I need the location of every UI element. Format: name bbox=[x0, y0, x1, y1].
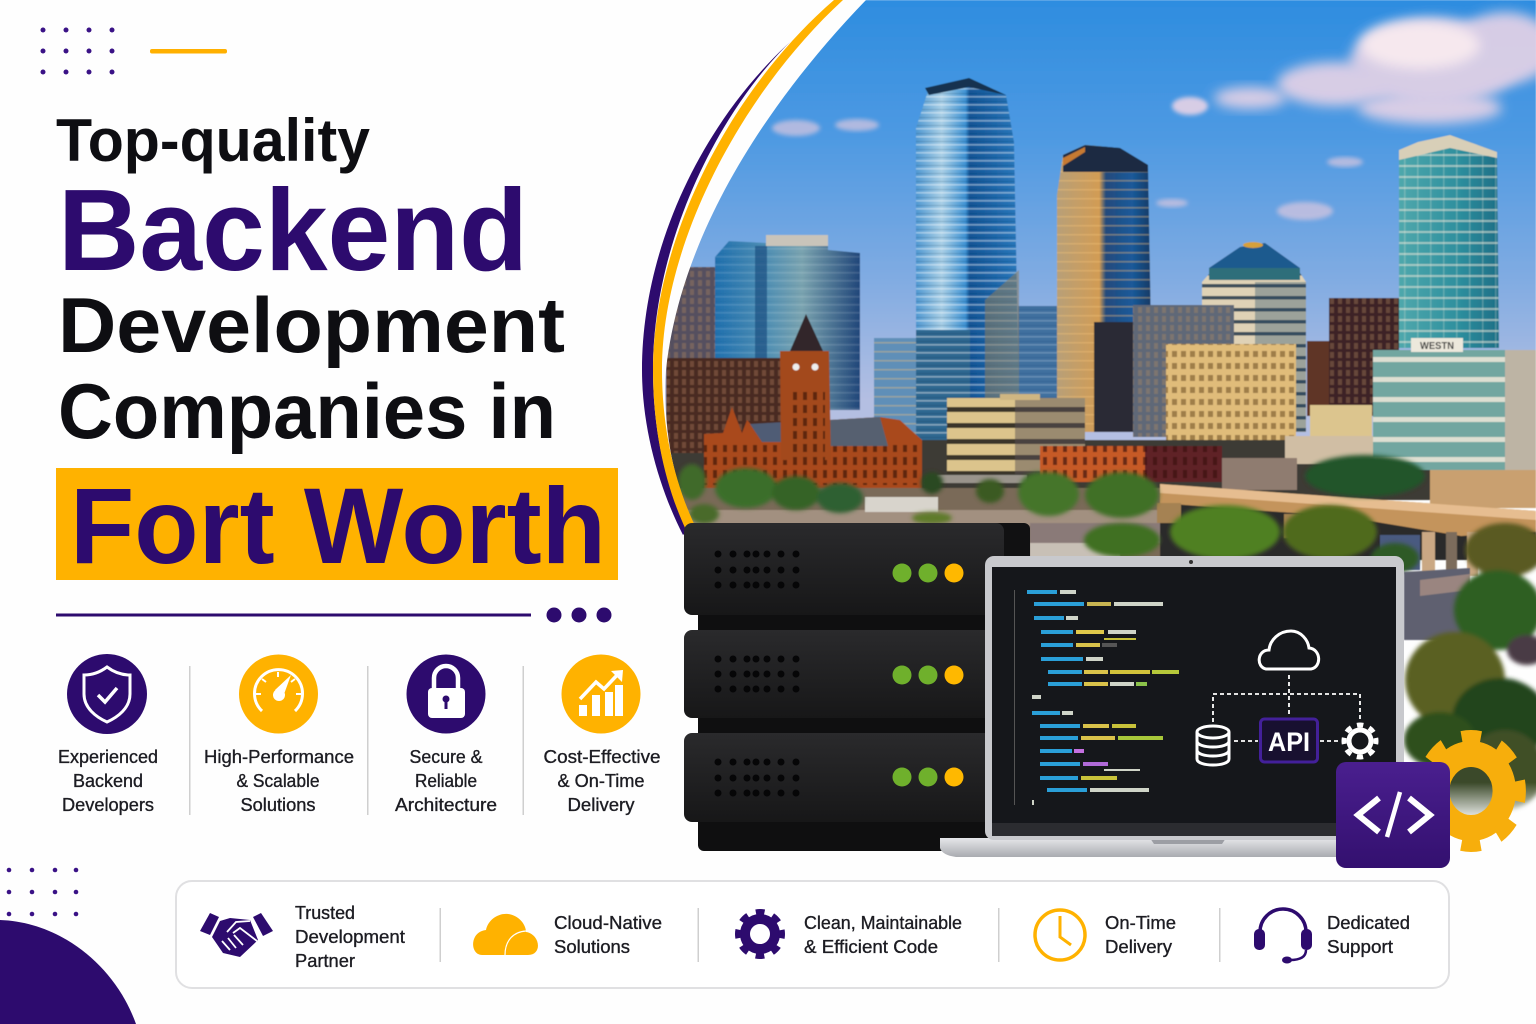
bottom-left dots bbox=[7, 868, 78, 916]
code tile bbox=[1336, 762, 1450, 868]
feature: experienced backend developers: Backend bbox=[73, 770, 143, 791]
small blue towers bbox=[874, 338, 918, 440]
feature: secure and reliable: Architecture bbox=[395, 794, 497, 815]
icon: growth chart bbox=[562, 654, 640, 734]
icon: purple gear bbox=[738, 912, 782, 956]
purple corner shape bbox=[0, 920, 136, 1024]
feature: high-performance: Solutions bbox=[240, 794, 316, 815]
westin building: WESTN bbox=[1420, 341, 1454, 352]
gold accent bar bbox=[150, 49, 227, 54]
feature: secure and reliable: Reliable bbox=[415, 770, 477, 791]
benefit: on-time delivery: On-Time bbox=[1105, 912, 1176, 933]
server unit 3 bbox=[684, 733, 1004, 822]
feature: experienced backend developers: Developers bbox=[62, 794, 154, 815]
server unit 1 bbox=[684, 523, 1030, 615]
feature: high-performance bbox=[204, 654, 354, 815]
server stack bbox=[684, 523, 1030, 851]
main glass tower bbox=[916, 78, 1019, 445]
benefit: cloud-native: Cloud-Native bbox=[554, 912, 662, 933]
benefit: trusted partner bbox=[200, 902, 405, 971]
benefit: on-time delivery bbox=[1035, 910, 1176, 960]
sky bbox=[640, 0, 1536, 470]
far left tower bbox=[666, 267, 716, 367]
dark filler behind low buildings bbox=[666, 440, 1536, 500]
courthouse with clock tower bbox=[704, 314, 922, 495]
feature: experienced backend developers: Experienced bbox=[58, 746, 158, 767]
benefit: trusted partner: Trusted bbox=[295, 902, 355, 923]
teal residential tower bbox=[1399, 135, 1499, 348]
title bbox=[56, 107, 618, 586]
tan office block bbox=[1165, 343, 1297, 441]
icon: cloud bbox=[1259, 631, 1319, 669]
clouds bbox=[772, 12, 1536, 220]
front beige office bbox=[947, 394, 1085, 474]
arc: purple bbox=[642, 42, 790, 535]
icon: handshake bbox=[200, 913, 273, 957]
divider with three dots bbox=[56, 608, 612, 622]
gold gear bbox=[1423, 738, 1519, 844]
grey mid-rise bbox=[1133, 305, 1234, 437]
feature: secure and reliable: Secure & bbox=[410, 746, 483, 767]
benefit: trusted partner: Development bbox=[295, 926, 405, 947]
feature: cost-effective: & On-Time bbox=[558, 770, 644, 791]
feature: high-performance: & Scalable bbox=[236, 770, 320, 791]
benefit: clean code bbox=[738, 912, 962, 957]
feature: high-performance: High-Performance bbox=[204, 746, 354, 767]
server unit 2 bbox=[684, 630, 1004, 718]
canopy building bbox=[865, 497, 938, 512]
icon: headset bbox=[1254, 909, 1312, 964]
rear chassis bbox=[698, 600, 998, 851]
highlighted city name: Fort Worth bbox=[70, 465, 606, 586]
feature: cost-effective: Delivery bbox=[568, 794, 635, 815]
benefit: cloud-native: Solutions bbox=[554, 936, 630, 957]
laptop lid bbox=[985, 556, 1404, 840]
benefit: dedicated support bbox=[1254, 909, 1410, 964]
bridge and piers bbox=[1157, 484, 1536, 576]
benefit: on-time delivery: Delivery bbox=[1105, 936, 1173, 957]
API box: API bbox=[1268, 727, 1310, 757]
dark low block bbox=[666, 358, 786, 453]
dark brown towers bbox=[1329, 298, 1399, 416]
low cream buildings bbox=[1310, 405, 1372, 437]
icon: shield bbox=[67, 654, 147, 734]
icon: settings gear bbox=[1344, 725, 1376, 757]
icon: clock bbox=[1035, 910, 1085, 960]
laptop bbox=[940, 556, 1404, 857]
feature: cost-effective bbox=[544, 654, 660, 815]
API box bbox=[1260, 719, 1318, 762]
feature: experienced backend developers bbox=[58, 654, 158, 815]
striped pyramid tower bbox=[1202, 242, 1306, 432]
title: Backend bbox=[58, 165, 528, 295]
road on the right bbox=[1404, 568, 1470, 640]
icon: speedometer bbox=[239, 654, 318, 734]
laptop screen bbox=[992, 567, 1396, 823]
benefit: dedicated support: Dedicated bbox=[1327, 912, 1410, 933]
westin building bbox=[1373, 338, 1536, 470]
notch bbox=[1150, 838, 1226, 844]
arc: gold bbox=[653, 0, 843, 530]
trees near the skyline bbox=[678, 455, 1425, 573]
concrete overpass bbox=[937, 475, 1185, 557]
feature: cost-effective: Cost-Effective bbox=[544, 746, 660, 767]
bottom benefits panel bbox=[176, 881, 1449, 988]
benefit: dedicated support: Support bbox=[1327, 936, 1393, 957]
benefit: cloud-native bbox=[473, 912, 662, 957]
benefit: clean code: Clean, Maintainable bbox=[804, 912, 962, 933]
icon: padlock bbox=[406, 654, 486, 734]
city skyline photo bbox=[640, 0, 1536, 830]
architecture diagram bbox=[1197, 631, 1376, 765]
decorative dots top-left bbox=[40, 28, 114, 74]
gold glass tower bbox=[1057, 145, 1151, 432]
benefit: clean code: & Efficient Code bbox=[804, 936, 938, 957]
blue glass cluster bbox=[715, 235, 860, 410]
feature: secure and reliable bbox=[395, 654, 497, 815]
icon: gold cloud bbox=[473, 914, 538, 955]
benefit: trusted partner: Partner bbox=[295, 950, 355, 971]
ground and road bbox=[680, 487, 1161, 556]
title: Top-quality bbox=[56, 107, 371, 174]
title: Companies in bbox=[58, 367, 556, 455]
icon: database bbox=[1197, 726, 1229, 765]
red brick low block bbox=[1040, 446, 1222, 482]
trees at the lower right bbox=[1404, 523, 1536, 830]
title: Development bbox=[58, 281, 565, 369]
laptop base bbox=[940, 838, 1345, 857]
code lines bbox=[1014, 590, 1179, 805]
